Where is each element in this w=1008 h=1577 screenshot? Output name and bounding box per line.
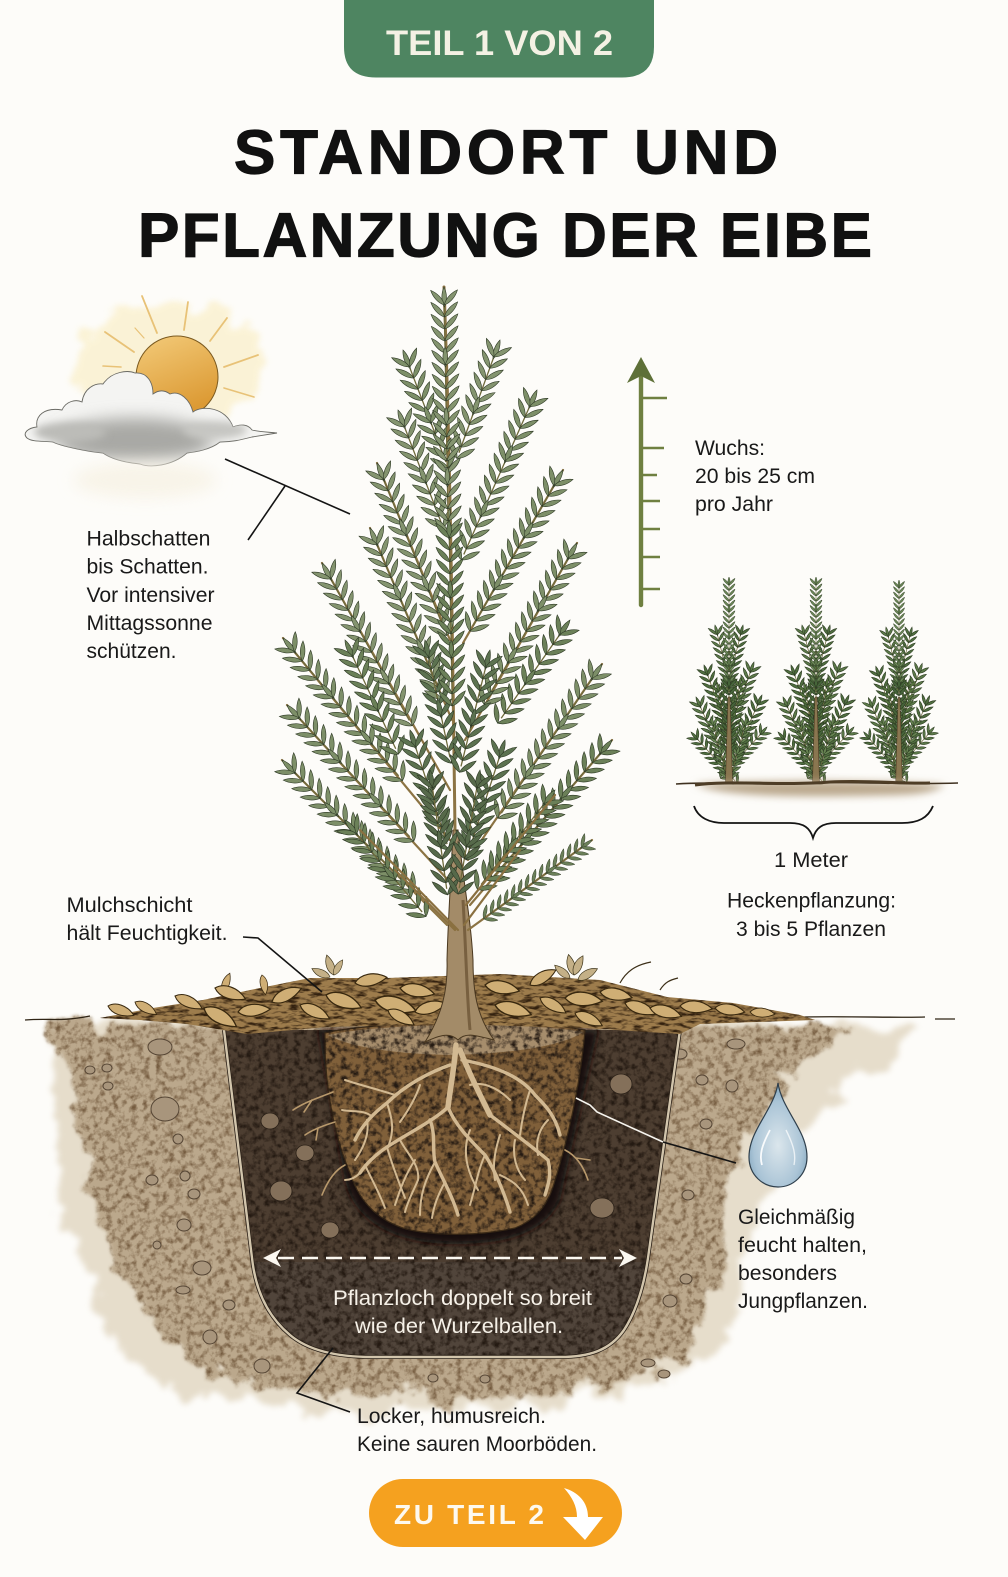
sun disc (136, 336, 218, 418)
lower bare branches (360, 795, 555, 930)
text: soil type: Locker, humusreich. (357, 1405, 546, 1428)
text: mulch (66, 894, 228, 945)
ground line (25, 1016, 955, 1020)
text: watering: besonders (738, 1262, 837, 1285)
icon: arrow down (563, 1488, 603, 1540)
text: light requirement: Halbschatten (86, 528, 210, 550)
root ball (293, 1023, 590, 1234)
trunk shading (463, 900, 470, 1030)
branch stems (282, 287, 612, 930)
trunk (425, 830, 494, 1042)
small yew 3 (858, 580, 940, 788)
pale soil wash (40, 1022, 925, 1412)
part badge: TEIL 1 VON 2 (386, 24, 613, 63)
text: hedge spacing: 3 bis 5 Pflanzen (736, 918, 886, 941)
outer roots (293, 1092, 590, 1195)
button: to part 2 (369, 1479, 622, 1547)
text: mulch: hält Feuchtigkeit. (66, 922, 228, 945)
leader line: soil (297, 1348, 350, 1412)
soil cross-section (25, 1016, 955, 1412)
text: watering: Jungpflanzen. (738, 1290, 868, 1313)
width arrow: planting hole (263, 1249, 637, 1267)
mulch sprouts (310, 954, 599, 983)
leader line: light requirement (225, 459, 350, 540)
text: planting hole width: Pflanzloch doppelt so breit (333, 1287, 592, 1310)
foliage plumes (271, 287, 623, 928)
title: STANDORT UND (234, 118, 778, 188)
text: watering: feucht halten, (738, 1234, 867, 1257)
text: mulch: Mulchschicht (66, 894, 193, 917)
text: watering (738, 1206, 868, 1313)
text: light requirement: Mittagssonne (86, 612, 212, 635)
hole fill (224, 1030, 680, 1357)
hedge of three small yews (676, 577, 958, 796)
root ball shadow (318, 1030, 598, 1244)
icon: water drop (749, 1083, 807, 1187)
trunk and tree (271, 287, 623, 1042)
sun rays (103, 296, 258, 397)
cloud (25, 372, 277, 466)
mulch body (100, 974, 815, 1034)
text: growth (695, 437, 815, 516)
part badge (344, 0, 654, 78)
text: soil type (357, 1405, 597, 1456)
text: growth: 20 bis 25 cm (695, 465, 815, 488)
text: soil type: Keine sauren Moorböden. (357, 1433, 597, 1456)
text: watering: Gleichmäßig (738, 1206, 855, 1229)
small yew 1 (685, 577, 773, 790)
text: light requirement: schützen. (86, 640, 176, 663)
sun glow (78, 306, 262, 430)
title: PFLANZUNG DER EIBE (138, 202, 872, 270)
title (138, 118, 872, 270)
text: growth: pro Jahr (695, 493, 773, 516)
text: growth: Wuchs: (695, 437, 765, 460)
text: hedge spacing (727, 849, 896, 941)
cloud under-wash (73, 462, 217, 498)
text: light requirement: bis Schatten. (86, 556, 208, 579)
ball body (325, 1023, 585, 1234)
stones in hole (261, 1074, 632, 1238)
hedge ground (676, 781, 958, 796)
text: hedge spacing: Heckenpflanzung: (727, 890, 896, 912)
text: light requirement (86, 528, 215, 663)
text: hedge spacing: 1 Meter (774, 849, 848, 872)
lower hole layer (257, 1262, 644, 1355)
mulch layer (100, 954, 815, 1034)
brace: 1 meter (694, 806, 933, 838)
roots (342, 1045, 560, 1218)
growth arrow scale (627, 357, 667, 605)
small yew 2 (772, 577, 860, 790)
mulch twigs (620, 962, 678, 990)
soil body (48, 1022, 850, 1398)
text: light requirement: Vor intensiver (86, 584, 215, 607)
planting hole (224, 1030, 680, 1362)
hole wall outline (224, 1030, 680, 1357)
ball top rim (328, 1025, 583, 1055)
mulch leaves (106, 965, 775, 1032)
stones in soil (85, 1039, 745, 1383)
icon: sun behind cloud (25, 296, 277, 498)
leader line: mulch (243, 937, 322, 992)
button: to part 2: ZU TEIL 2 (394, 1499, 544, 1530)
text: planting hole width: wie der Wurzelballen. (354, 1315, 563, 1338)
text: planting hole width (333, 1287, 592, 1338)
leader line: moisture (576, 1098, 736, 1163)
